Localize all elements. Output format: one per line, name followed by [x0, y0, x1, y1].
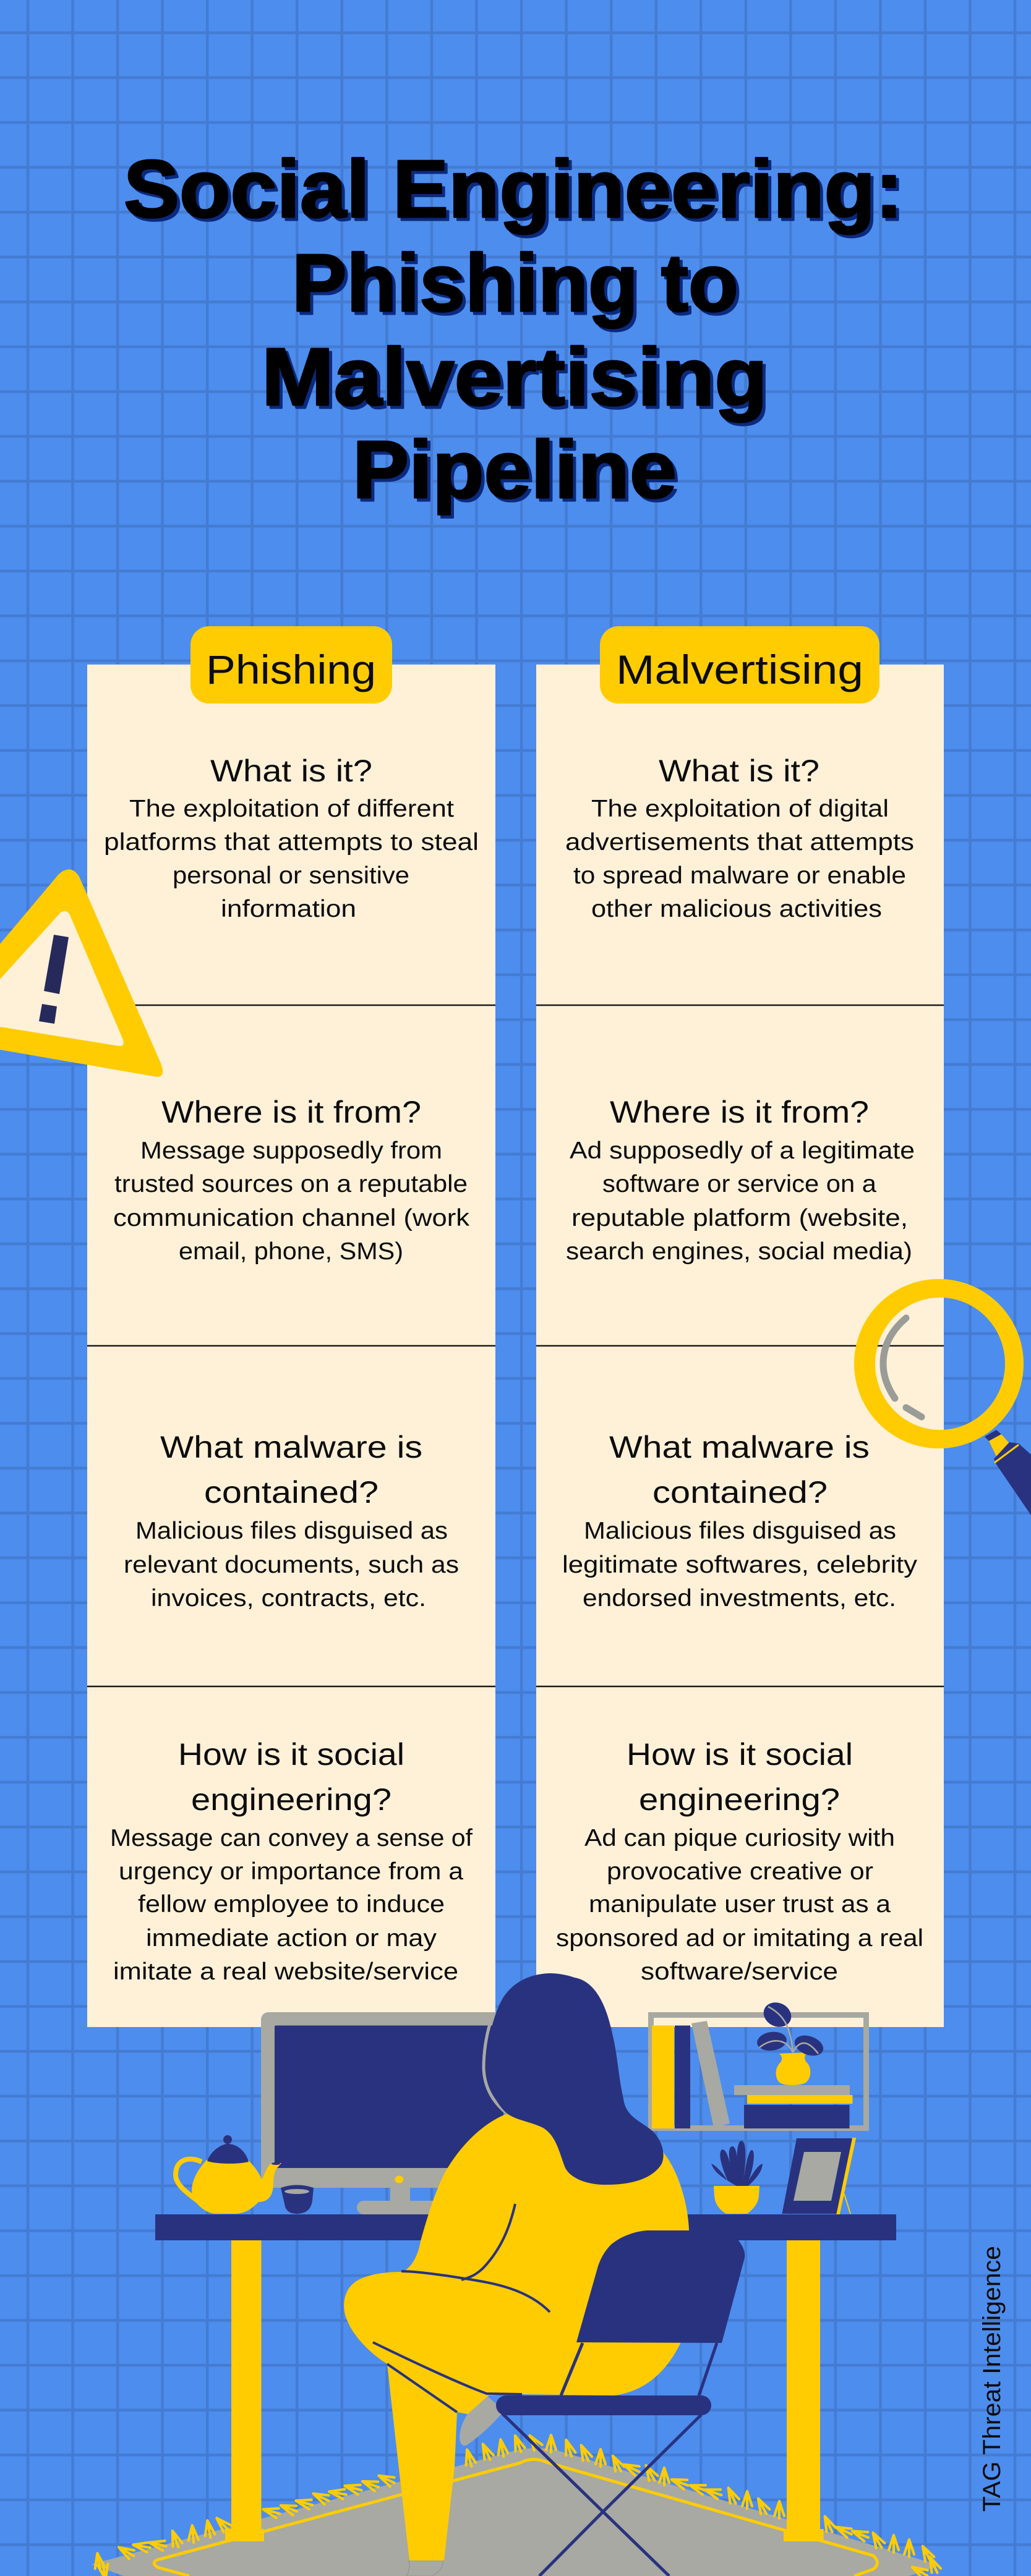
illustration: chair [496, 2230, 745, 2576]
malvertising: what malware is contained: legitimate softwares, celebrity [562, 1552, 918, 1578]
malvertising: what malware is contained: Malicious files disguised as [584, 1518, 896, 1544]
malvertising: what malware is contained: contained? [652, 1475, 828, 1510]
phishing: what is it: What is it? [210, 754, 372, 788]
panel: malvertising [536, 626, 944, 2027]
phishing: what is it: platforms that attempts to steal [104, 829, 479, 856]
illustration: cup [281, 2185, 314, 2214]
phishing: how is it social engineering: Message can convey a sense of [110, 1825, 473, 1851]
phishing: how is it social engineering: urgency or importance from a [119, 1858, 463, 1885]
malvertising: what malware is contained: What malware is [609, 1430, 870, 1464]
malvertising badge [600, 626, 879, 704]
phishing: how is it social engineering: fellow employee to induce [138, 1891, 445, 1918]
icon: warning triangle [0, 869, 163, 1077]
phishing: how is it social engineering: How is it social [178, 1737, 404, 1772]
phishing: what malware is contained: invoices, contracts, etc. [151, 1585, 426, 1612]
illustration: monitor [261, 2012, 503, 2214]
phishing: what malware is contained: What malware is [160, 1430, 422, 1464]
credit text: TAG Threat Intelligence [978, 2246, 1006, 2512]
person: foot on floor [406, 2561, 443, 2576]
malvertising: what is it: The exploitation of digital [591, 796, 889, 822]
malvertising: what is it: to spread malware or enable [573, 862, 906, 889]
phishing: where is it from: Where is it from? [161, 1095, 421, 1129]
malvertising: where is it from: Where is it from? [610, 1095, 869, 1129]
phishing: where is it from [113, 1095, 470, 1265]
malvertising: where is it from: search engines, social media) [566, 1238, 912, 1265]
malvertising: what malware is contained: endorsed investments, etc. [583, 1585, 896, 1612]
title: Malvertising [262, 331, 768, 422]
malvertising: how is it social engineering [556, 1737, 923, 1985]
panel: phishing [87, 626, 495, 2027]
malvertising: how is it social engineering: sponsored ad or imitating a real [556, 1925, 923, 1952]
malvertising: where is it from: Ad supposedly of a legitimate [570, 1137, 915, 1164]
malvertising: how is it social engineering: manipulate user trust as a [589, 1891, 891, 1918]
rug fringe [93, 2433, 942, 2576]
person: hair [484, 2015, 507, 2114]
phishing: what is it: information [221, 896, 356, 922]
phishing: what malware is contained: Malicious files disguised as [135, 1518, 448, 1544]
phishing: where is it from: Message supposedly from [140, 1137, 442, 1164]
malvertising: how is it social engineering: provocative creative or [607, 1858, 873, 1885]
phishing: what malware is contained: contained? [204, 1475, 379, 1510]
phishing badge [190, 626, 392, 704]
phishing: what is it: personal or sensitive [173, 862, 409, 889]
title: Social Engineering: [124, 143, 903, 234]
illustration: desk [155, 2214, 896, 2541]
malvertising: how is it social engineering: engineering? [639, 1782, 840, 1817]
malvertising: what is it: other malicious activities [591, 896, 882, 922]
malvertising: how is it social engineering: Ad can pique curiosity with [584, 1825, 895, 1851]
phishing: what malware is contained [124, 1430, 459, 1612]
illustration: teapot [176, 2135, 281, 2214]
phishing: what is it [104, 754, 479, 922]
malvertising: where is it from: software or service on a [602, 1171, 876, 1197]
illustration: potted plant [711, 2141, 763, 2214]
malvertising: how is it social engineering: software/service [641, 1958, 838, 1985]
phishing: what malware is contained: relevant documents, such as [124, 1552, 459, 1578]
person: raised foot [460, 2395, 504, 2446]
phishing: where is it from: email, phone, SMS) [179, 1238, 403, 1265]
malvertising: where is it from [566, 1095, 915, 1265]
phishing: what is it: The exploitation of different [129, 796, 454, 822]
malvertising: what is it: advertisements that attempts [565, 829, 914, 856]
phishing: how is it social engineering: imitate a real website/service [113, 1958, 458, 1985]
title: Pipeline [353, 424, 677, 515]
phishing: how is it social engineering: engineering? [191, 1782, 391, 1817]
title [124, 143, 903, 515]
phishing badge: Phishing [206, 647, 376, 692]
person: body [344, 2114, 689, 2561]
illustration: rug [92, 2433, 942, 2576]
malvertising: how is it social engineering: How is it social [627, 1737, 853, 1772]
illustration: person [344, 1973, 689, 2576]
malvertising: where is it from: reputable platform (website, [571, 1205, 908, 1231]
illustration: shelf with books and plant [651, 1998, 866, 2128]
person: clothing lines [373, 2204, 550, 2412]
malvertising: what is it: What is it? [659, 754, 819, 788]
phishing: where is it from: communication channel (work [113, 1205, 470, 1231]
phishing: how is it social engineering [110, 1737, 473, 1985]
malvertising: what malware is contained [562, 1430, 918, 1612]
illustration: picture frame [782, 2138, 855, 2214]
icon: magnifying glass [854, 1279, 1031, 1515]
title: Phishing to [292, 237, 738, 328]
phishing: how is it social engineering: immediate action or may [146, 1925, 437, 1952]
malvertising badge: Malvertising [616, 647, 863, 692]
phishing: where is it from: trusted sources on a reputable [114, 1171, 468, 1197]
malvertising: what is it [565, 754, 914, 922]
